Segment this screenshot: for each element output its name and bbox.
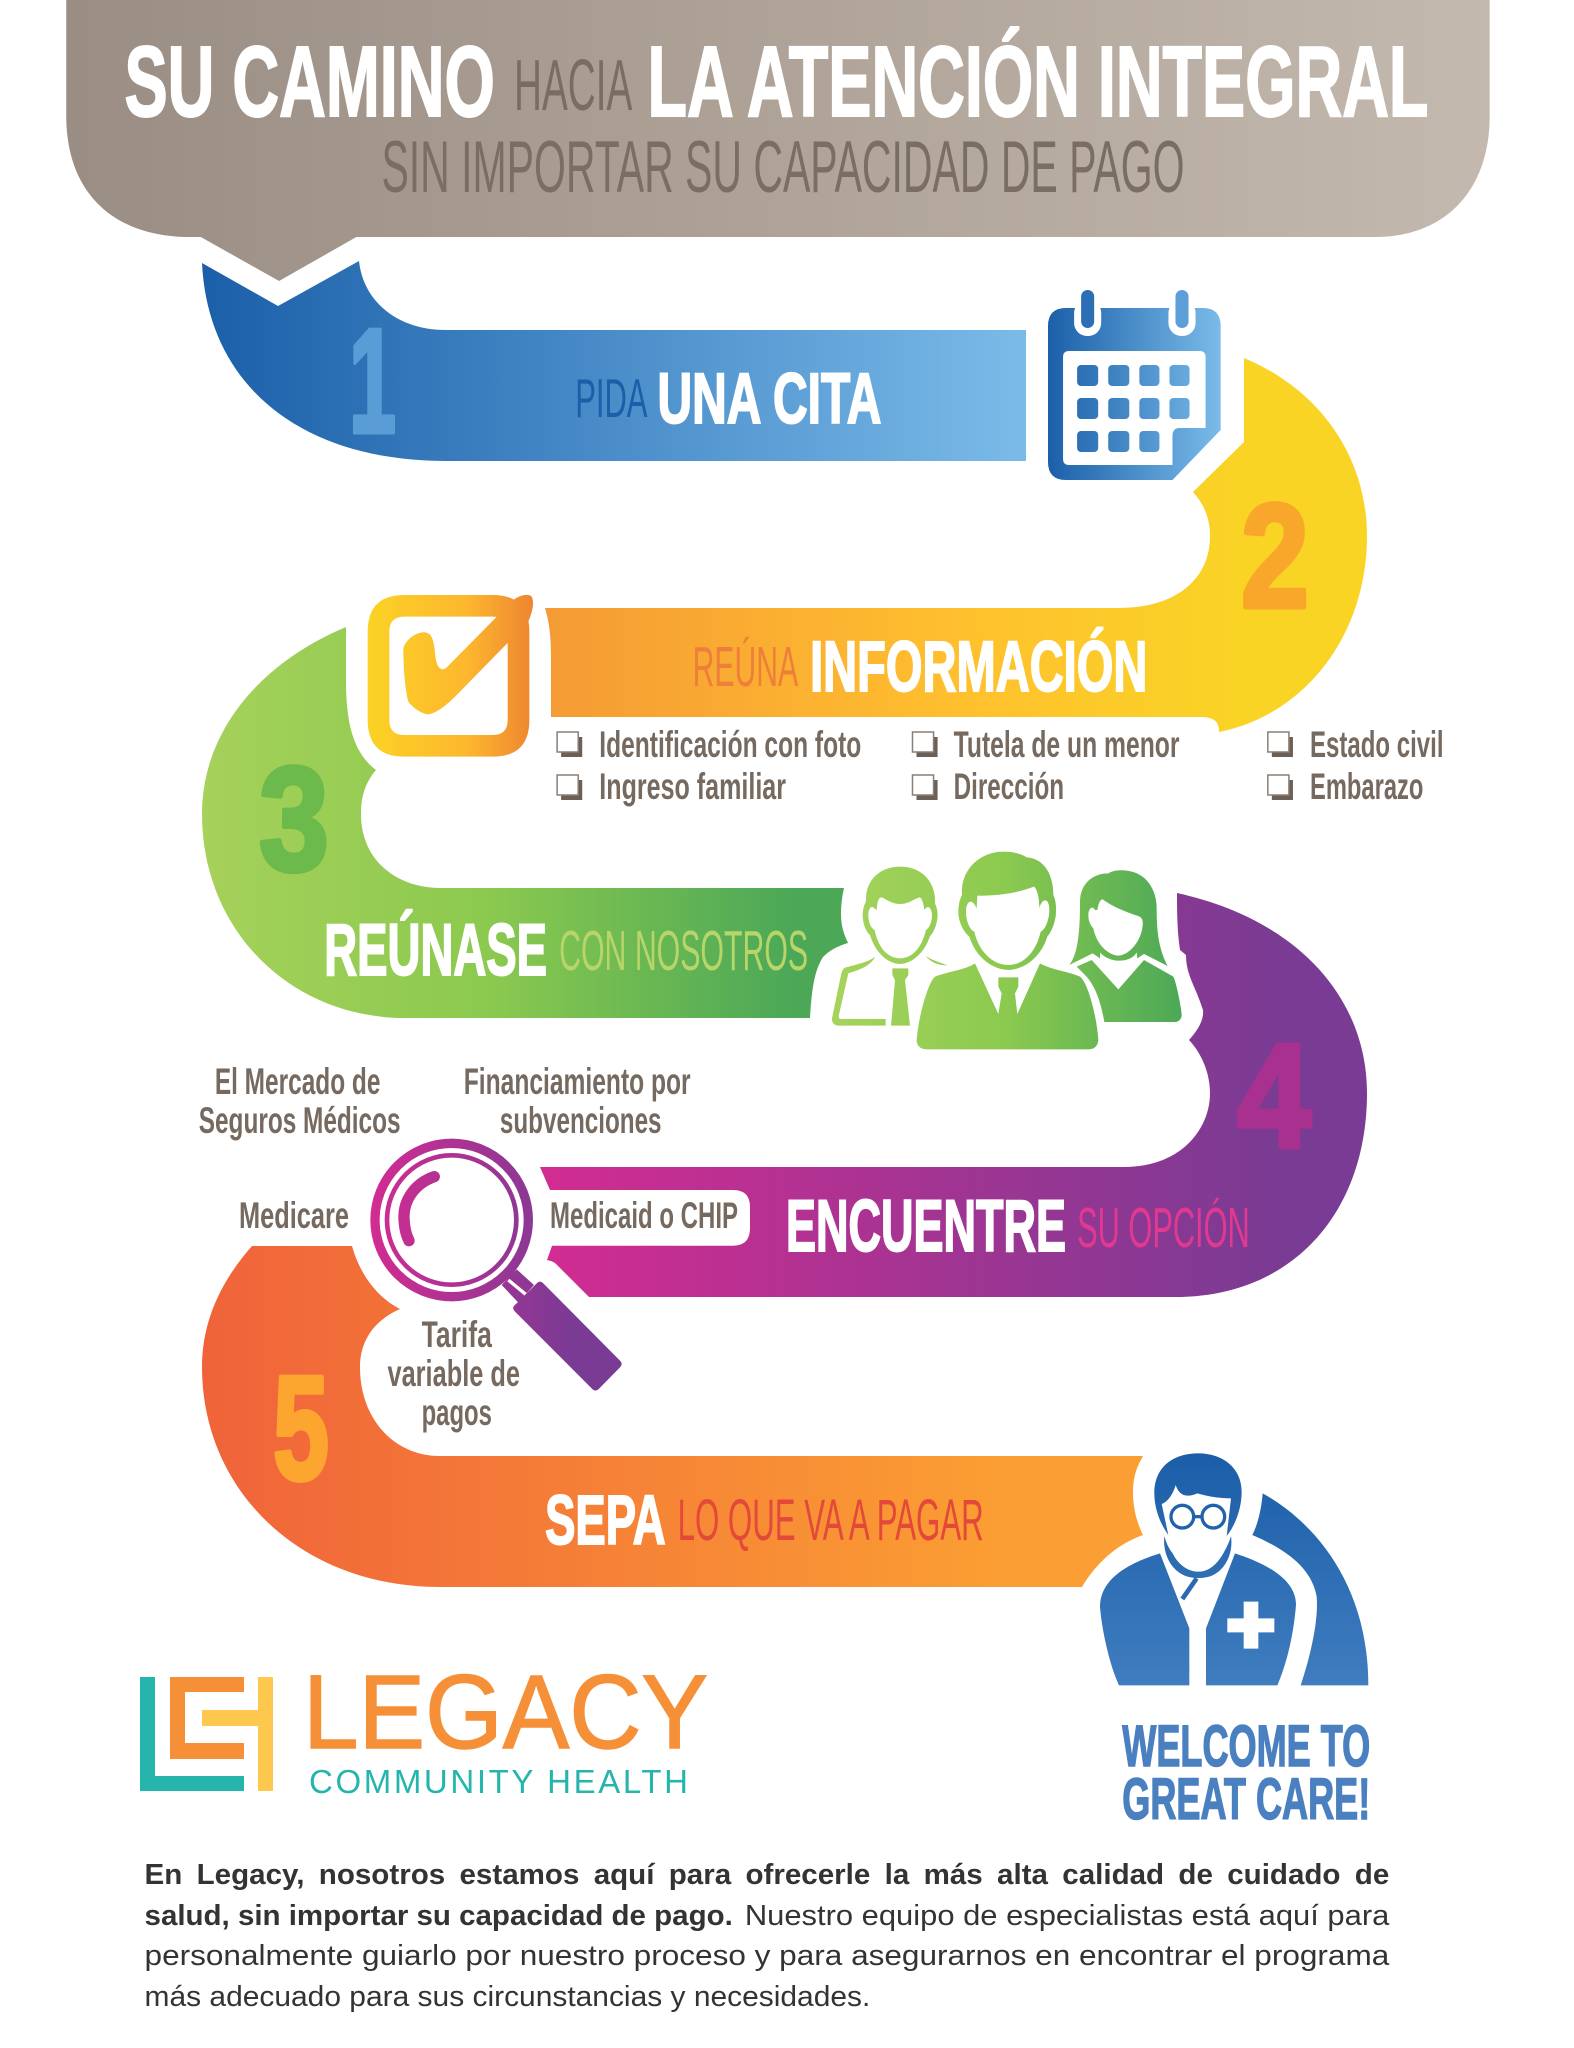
item: Tutela de un menor: [912, 723, 1180, 765]
step 5 heading: [545, 1481, 984, 1559]
step 4 heading: SU OPCIÓN: [1077, 1196, 1250, 1260]
label: El Mercado de Seguros Médicos: Seguros Médicos: [199, 1099, 401, 1141]
slogan: GREAT CARE!: [1122, 1767, 1370, 1832]
numeral 3: 3: [259, 737, 329, 902]
logo mark: [140, 1677, 273, 1791]
slogan: WELCOME TO: [1122, 1714, 1370, 1779]
icon: checkbox: [368, 595, 533, 757]
title: [124, 26, 1428, 138]
step 4 heading: ENCUENTRE: [786, 1186, 1066, 1267]
step 2 heading: INFORMACIÓN: [810, 628, 1147, 707]
label: Tarifa variable de pagos: pagos: [422, 1391, 492, 1433]
icon: people: [832, 852, 1182, 1049]
numeral 2: 2: [1241, 474, 1309, 639]
step 3 heading: REÚNASE: [324, 910, 547, 991]
step 5 heading: LO QUE VA A PAGAR: [678, 1488, 984, 1553]
label: Financiamiento por subvenciones: Financiamiento por: [464, 1060, 691, 1102]
label: Tarifa variable de pagos: [387, 1313, 520, 1433]
icon: calendar: [1048, 290, 1221, 480]
label: Medicaid o CHIP: Medicaid o CHIP: [550, 1195, 738, 1236]
panel: step 5: [202, 1246, 1143, 1587]
numeral 4: 4: [1237, 1014, 1311, 1179]
label: Financiamiento por subvenciones: [464, 1060, 691, 1141]
banner shape: [66, 0, 1490, 281]
step 2 heading: [693, 628, 1147, 707]
checklist: documents: [557, 723, 1444, 807]
body paragraph: Nuestro equipo de especialistas está aquí para: [745, 1900, 1390, 1932]
band 2: [545, 358, 1367, 732]
tagline: COMMUNITY HEALTH: [309, 1763, 688, 1800]
body paragraph: En Legacy, nosotros estamos aquí para ofrecerle la más alta calidad de cuidado de: [145, 1859, 1389, 1891]
item: Dirección: [912, 765, 1064, 807]
step 5 heading: SEPA: [545, 1481, 666, 1559]
label: Tarifa variable de pagos: variable de: [387, 1352, 520, 1394]
band 1: [202, 261, 1026, 461]
slogan: [1122, 1714, 1370, 1832]
band 5: [202, 1246, 1143, 1587]
item: Identificación con foto: [557, 723, 861, 765]
label: El Mercado de Seguros Médicos: [199, 1060, 401, 1141]
item: Ingreso familiar: [557, 765, 786, 807]
body paragraph: personalmente guiarlo por nuestro proceso y para asegurarnos en encontrar el programa: [145, 1940, 1390, 1972]
item: Embarazo: Embarazo: [1310, 765, 1423, 807]
panel: step 1: [202, 261, 1221, 480]
title: HACIA: [514, 46, 632, 126]
header banner: [66, 0, 1490, 281]
panel: step 4: [199, 893, 1367, 1297]
step 1 heading: [575, 360, 881, 439]
logo: Legacy Community Health: [140, 1654, 708, 1800]
wordmark: LEGACY: [303, 1654, 708, 1771]
item: Tutela de un menor: Tutela de un menor: [954, 723, 1180, 765]
item: Dirección: Dirección: [954, 765, 1064, 807]
step 1 heading: PIDA: [575, 367, 648, 429]
band 4: [540, 893, 1367, 1297]
step 2 heading: REÚNA: [693, 635, 798, 699]
item: Estado civil: [1268, 723, 1444, 765]
item: Ingreso familiar: Ingreso familiar: [599, 765, 786, 807]
icon: doctor: [1100, 1453, 1368, 1685]
title: SU CAMINO: [124, 26, 495, 138]
body paragraph: [145, 1859, 1390, 2013]
item: Identificación con foto: Identificación con foto: [599, 723, 861, 765]
label: Financiamiento por subvenciones: subvenciones: [500, 1099, 662, 1141]
step 1 heading: UNA CITA: [658, 360, 881, 439]
label: Tarifa variable de pagos: Tarifa: [422, 1313, 492, 1355]
band 3: [202, 627, 848, 1018]
label: El Mercado de Seguros Médicos: El Mercado de: [215, 1060, 380, 1102]
body paragraph: salud, sin importar su capacidad de pago.: [145, 1900, 733, 1932]
label: Medicare: Medicare: [239, 1195, 349, 1236]
icon: magnifying glass: [370, 1138, 622, 1390]
body paragraph: más adecuado para sus circunstancias y necesidades.: [145, 1981, 870, 2013]
item: Embarazo: [1268, 765, 1423, 807]
step 3 heading: CON NOSOTROS: [559, 919, 808, 983]
numeral 5: 5: [273, 1346, 329, 1511]
item: Estado civil: Estado civil: [1310, 723, 1444, 765]
panel: step 3: [202, 627, 1182, 1049]
numeral 1: 1: [349, 299, 396, 464]
panel: step 2: [368, 358, 1444, 807]
